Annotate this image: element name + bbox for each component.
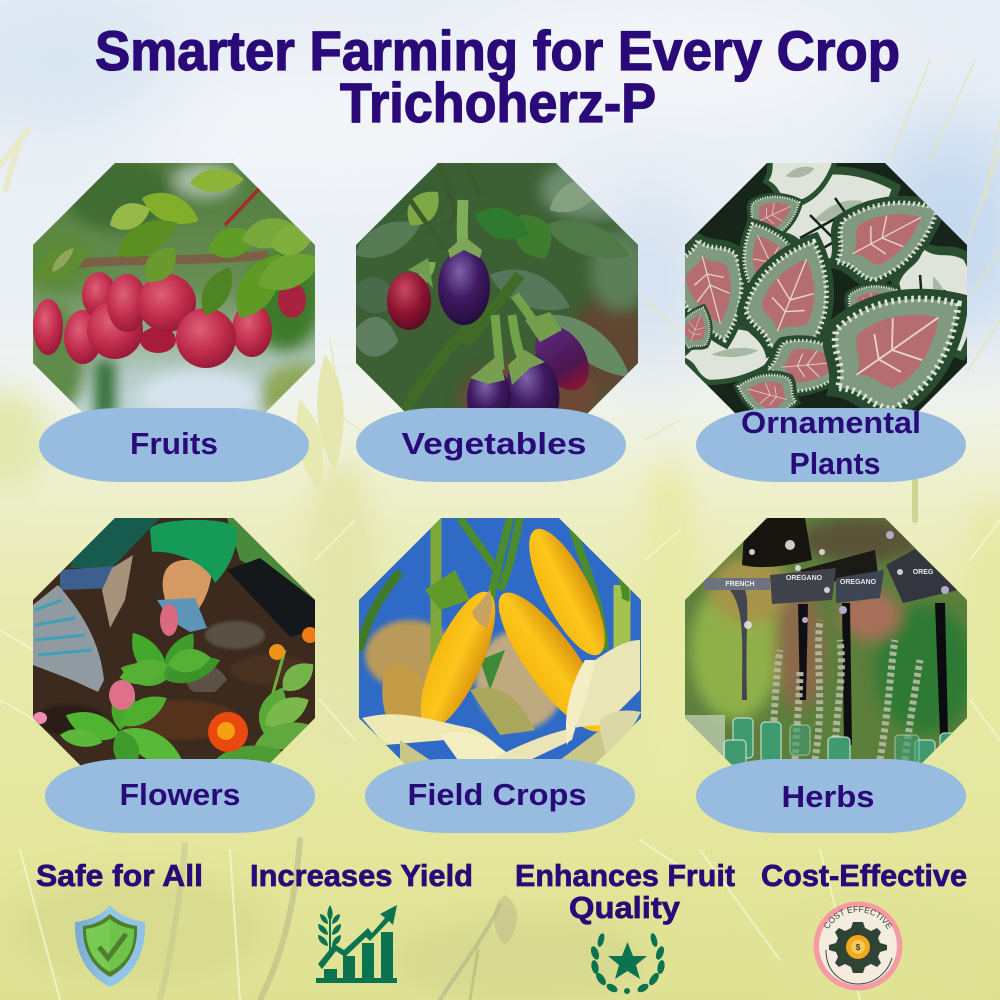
- benefit: safe for all: [36, 858, 203, 987]
- benefit: enhances fruit quality: Quality: [569, 890, 681, 925]
- photo: herb seedlings with chalkboard signs: FRENCH: [725, 581, 755, 588]
- photo: corn cobs against blue sky: [359, 518, 641, 764]
- panel: flowers: [33, 518, 321, 833]
- icon: star in laurel wreath: [589, 932, 666, 994]
- label pill: ornamental plants: [696, 405, 966, 482]
- photo: caladium leaves: [685, 163, 967, 414]
- photo: herb seedlings with chalkboard signs: OREG: [913, 569, 934, 576]
- label pill: fruits: [39, 408, 309, 482]
- benefit: cost-effective: Cost-Effective: [761, 858, 967, 893]
- photo: herb seedlings with chalkboard signs: OREGANO: [786, 575, 823, 582]
- panel: fruits: [33, 163, 315, 482]
- benefit: increases yield: [250, 858, 473, 983]
- panel: vegetables: [346, 160, 650, 482]
- label pill: ornamental plants: Plants: [790, 446, 880, 481]
- panel: ornamental plants: [685, 163, 967, 482]
- icon: wheat with rising bar chart: [316, 905, 397, 983]
- label pill: herbs: Herbs: [782, 779, 874, 814]
- photo: eggplants on the plant: [356, 163, 638, 414]
- photo: plums on a branch: [33, 163, 315, 412]
- benefit: enhances fruit quality: [515, 858, 735, 994]
- label pill: herbs: [696, 759, 966, 833]
- label pill: vegetables: Vegetables: [402, 426, 586, 461]
- icon: cost effective gear badge: [814, 902, 902, 990]
- label pill: fruits: Fruits: [130, 426, 218, 461]
- benefit: enhances fruit quality: Enhances Fruit: [515, 858, 735, 893]
- title: Smarter Farming for Every Crop: [95, 19, 900, 82]
- title: Trichoherz-P: [340, 71, 656, 134]
- panel: herbs: [685, 518, 975, 833]
- benefit: increases yield: Increases Yield: [250, 858, 473, 893]
- label pill: field crops: Field Crops: [408, 777, 586, 812]
- icon: cost effective gear badge: COST EFFECTIVE: [824, 906, 892, 930]
- icon: green shield with check: [75, 905, 145, 987]
- photo: herb seedlings with chalkboard signs: [685, 518, 967, 765]
- title: [95, 19, 900, 134]
- label pill: ornamental plants: Ornamental: [741, 405, 921, 440]
- benefit: safe for all: Safe for All: [36, 858, 203, 893]
- photo: herb seedlings with chalkboard signs: OREGANO: [840, 579, 877, 586]
- label pill: field crops: [365, 759, 635, 833]
- panel: field crops: [359, 518, 641, 833]
- photo: hands planting flowers: [33, 518, 315, 766]
- icon: cost effective gear badge: $: [856, 943, 861, 952]
- benefit: cost-effective: [761, 858, 967, 990]
- label pill: flowers: [45, 759, 315, 833]
- label pill: flowers: Flowers: [120, 777, 240, 812]
- label pill: vegetables: [356, 408, 626, 482]
